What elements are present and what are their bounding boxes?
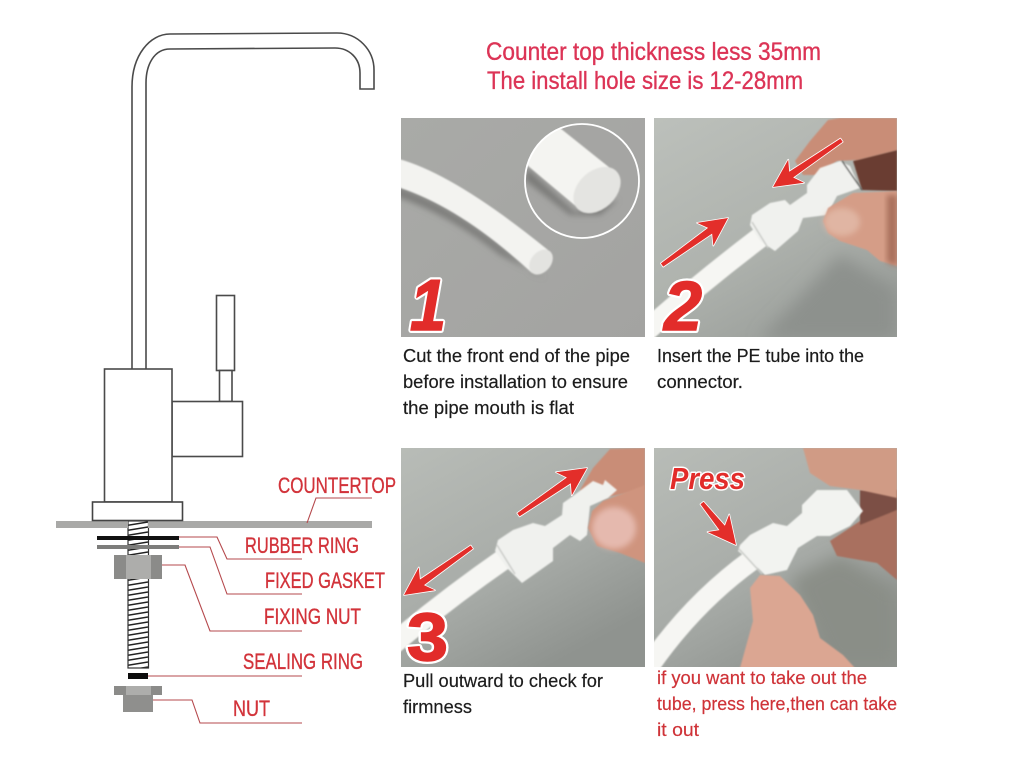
panel: press photo [645,448,897,672]
step number 3: 3 [407,599,448,675]
upper finger [580,448,645,500]
hand behind connector [795,118,897,191]
caption: press note [657,667,897,740]
label: fixed gasket: FIXED GASKET [265,568,385,593]
white tube and connector [392,480,617,645]
sealing ring [128,673,148,679]
arrows [403,467,588,596]
step number 1: 1 [410,266,446,346]
label: sealing ring: SEALING RING [243,649,363,674]
caption: press note: tube, press here,then can take [657,693,897,714]
title [486,38,821,95]
panel: step 3 photo [392,448,645,675]
step number 1 [408,277,446,333]
faucet spout [132,33,374,369]
shadow [770,256,896,337]
caption: step 1: the pipe mouth is flat [403,397,574,418]
step number 2: 2 [662,267,702,345]
title: Counter top thickness less 35mm [486,38,821,66]
label: countertop: COUNTERTOP [278,473,396,498]
base flange [92,502,182,520]
magnifier inset [524,123,640,239]
caption: press note: it out [657,719,699,740]
caption: step 3: Pull outward to check for [403,670,603,691]
upper finger and thumb [740,448,897,668]
faucet handle [216,296,234,402]
caption: step 2: Insert the PE tube into the [657,345,864,366]
shadow [790,554,892,646]
step number 1: 1 [410,266,446,346]
caption: press note: if you want to take out the [657,667,867,688]
threaded rod [128,521,148,668]
caption: step 3 [403,670,603,717]
white tube [401,159,554,275]
thumb [588,485,645,563]
step number 2 [660,278,704,333]
faucet diagram [56,33,396,723]
press label: Press [670,461,745,496]
arrow [700,500,737,546]
caption: step 2: connector. [657,371,743,392]
caption: step 1 [403,345,630,418]
label: fixing nut: FIXING NUT [264,604,361,629]
fingers behind connector [830,490,897,580]
leader lines [148,498,372,723]
thumb [823,191,897,266]
fixing nut [114,555,162,579]
arrows [660,138,844,268]
caption: step 2 [657,345,864,392]
step number 3 [406,610,449,664]
white tube and connector [645,161,862,332]
title: The install hole size is 12-28mm [487,67,803,95]
caption: step 1: before installation to ensure [403,371,628,392]
countertop slab [56,521,372,528]
panel: step 1 photo [395,118,645,346]
step number 3: 3 [407,599,448,675]
label: nut: NUT [233,696,270,721]
caption: step 3: firmness [403,696,472,717]
step number 2: 2 [662,267,702,345]
faucet body [104,369,242,502]
caption: step 1: Cut the front end of the pipe [403,345,630,366]
white tube and connector [645,490,863,672]
fixed gasket [97,545,179,549]
label: rubber ring: RUBBER RING [245,533,359,558]
nut [114,686,162,712]
panel: step 2 photo [645,118,897,345]
rubber ring [97,536,179,540]
